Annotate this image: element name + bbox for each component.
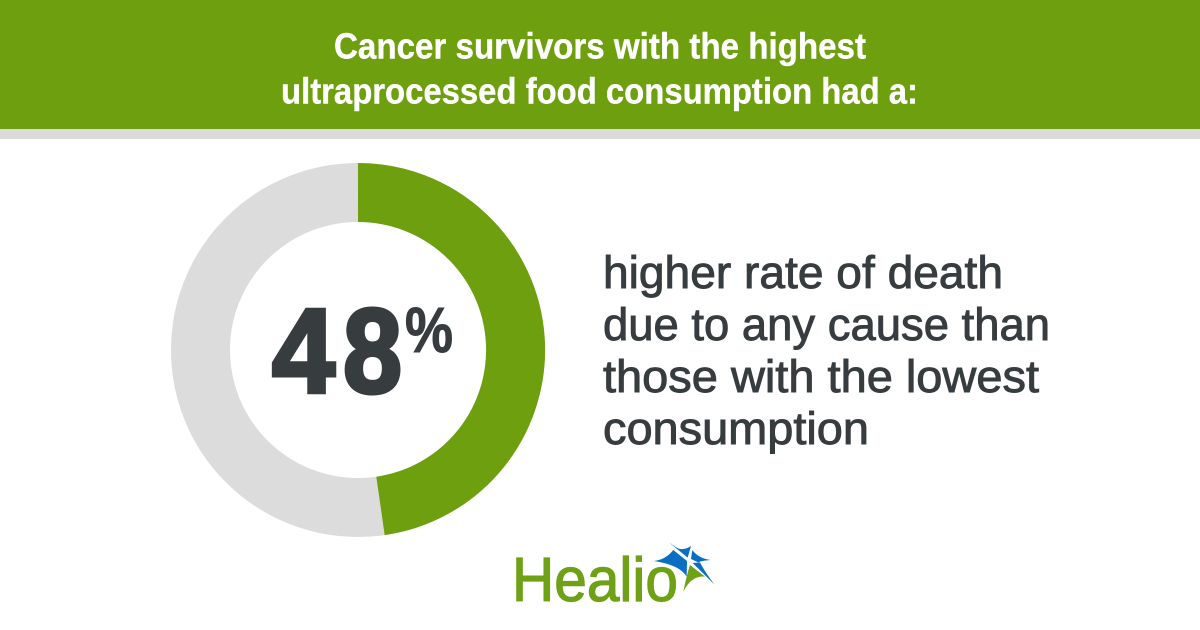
- statistic: 48%: 8: [343, 284, 402, 418]
- description text: those with the lowest: [603, 351, 1040, 402]
- header banner: [0, 0, 1200, 139]
- Healio logo: [512, 542, 714, 615]
- heading: Cancer survivors with the highest: [334, 26, 866, 66]
- description text: due to any cause than: [603, 299, 1050, 350]
- icon: star: [654, 542, 714, 592]
- description text: consumption: [603, 403, 869, 454]
- logo wordmark: Healio: [512, 546, 678, 615]
- description text: [603, 247, 1050, 454]
- heading: [281, 26, 918, 112]
- heading: ultraprocessed food consumption had a:: [281, 70, 918, 112]
- statistic: 48%: %: [405, 294, 453, 366]
- description text: higher rate of death: [603, 247, 1003, 298]
- donut chart: 48%: [200, 192, 516, 508]
- statistic: 48%: 4: [272, 284, 335, 418]
- statistic: 48%: [272, 284, 453, 418]
